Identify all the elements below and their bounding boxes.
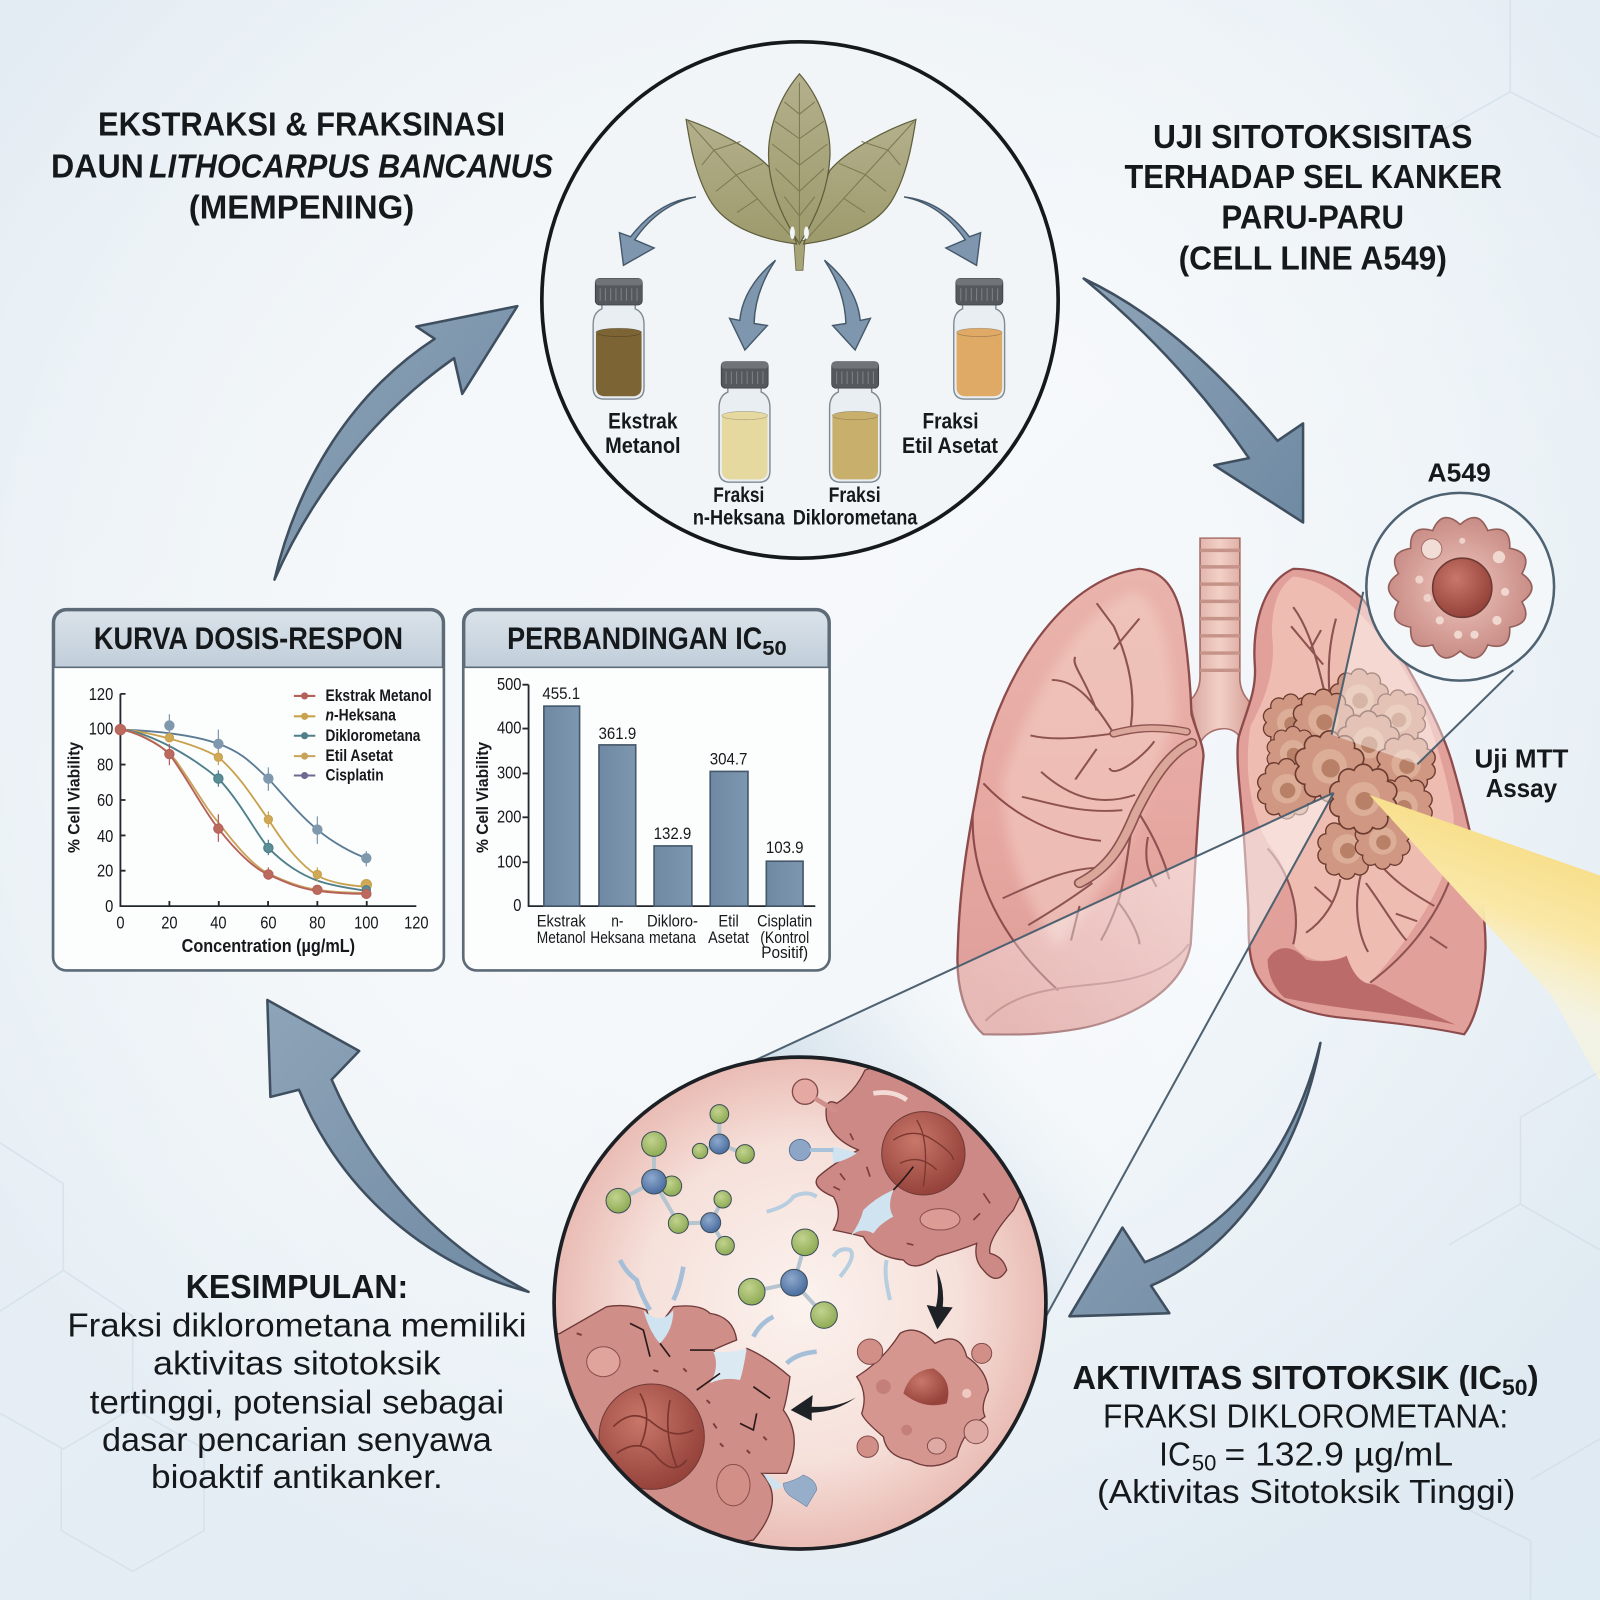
- arrow: to methanol: [619, 197, 696, 265]
- cytotoxic activity text: [1072, 1360, 1539, 1511]
- bar chart: n-: [611, 913, 623, 931]
- cell: apoptotic cell: [857, 1330, 992, 1466]
- right lung: [1238, 569, 1486, 1034]
- line chart axes: 100: [89, 719, 113, 739]
- molecules: [606, 1105, 837, 1328]
- conclusion text: dasar pencarian senyawa: [102, 1422, 492, 1459]
- line chart axes: 100: [354, 913, 379, 933]
- heading: extraction and fractionation: [51, 107, 554, 226]
- cytotoxic activity text: FRAKSI DIKLOROMETANA:: [1103, 1399, 1508, 1436]
- arrow: apoptosis to lysis: [791, 1395, 856, 1421]
- panel header: KURVA DOSIS-RESPON: [94, 620, 403, 656]
- label: fraksi diklorometana: [793, 483, 918, 529]
- icon: three leaves: [686, 74, 916, 270]
- cytotoxic activity text: 50: [1502, 1375, 1528, 1400]
- legend: n-Heksana: [326, 706, 397, 724]
- panel: dose-response curve: [53, 609, 444, 970]
- panel: cell destruction circle: [540, 1057, 1047, 1560]
- label: fraksi etil asetat: Etil Asetat: [902, 433, 998, 458]
- bar chart: 455.1: [542, 685, 580, 703]
- heading: extraction and fractionation: LITHOCARPUS BANCANUS: [149, 149, 554, 186]
- label: MTT assay: Uji MTT: [1474, 745, 1569, 773]
- bar chart: 304.7: [710, 750, 747, 768]
- line chart axes: 60: [97, 790, 113, 810]
- line chart axes: [66, 684, 429, 956]
- illustration: lungs: [957, 538, 1486, 1035]
- bar chart: 300: [497, 763, 521, 783]
- cell: bottom left cancer cell: [558, 1259, 817, 1542]
- bar chart: Heksana: [590, 929, 645, 947]
- cytotoxic activity text: (Aktivitas Sitotoksik Tinggi): [1097, 1474, 1515, 1511]
- bar chart: Asetat: [708, 929, 749, 947]
- line chart axes: 20: [161, 913, 178, 933]
- inset: A549 cell: [1366, 493, 1554, 681]
- magnifier cone to cells: [753, 793, 1334, 1318]
- cell: top right cancer cell: [766, 1068, 1020, 1300]
- line chart axes: 60: [260, 913, 277, 933]
- bar chart: Dikloro-: [647, 913, 698, 931]
- panel header: [465, 611, 828, 667]
- heading: cytotoxicity test: (CELL LINE A549): [1179, 240, 1447, 277]
- bar chart: 400: [497, 718, 521, 738]
- cytotoxic activity text: IC: [1159, 1436, 1191, 1473]
- left lung: [957, 569, 1204, 1035]
- bar chart: 361.9: [598, 725, 636, 743]
- heading: cytotoxicity test: [1124, 119, 1502, 277]
- arrow: to dichloromethane: [824, 260, 870, 350]
- bar chart: 132.9: [654, 825, 691, 843]
- vial: dichloromethane: [830, 362, 880, 482]
- bar chart: 100: [497, 851, 521, 871]
- vial: n-hexane: [719, 362, 770, 482]
- bar chart: % Cell Viability: [474, 742, 492, 853]
- label: fraksi n-heksana: n-Heksana: [693, 505, 786, 529]
- label: ekstrak metanol: Ekstrak: [608, 409, 678, 434]
- arrow: conclusion to charts: [267, 1000, 529, 1292]
- conclusion text: KESIMPULAN:: [186, 1269, 408, 1306]
- line chart axes: 20: [97, 861, 113, 881]
- legend: Diklorometana: [326, 727, 421, 745]
- tumor cluster: [1258, 669, 1435, 879]
- panel: IC50 comparison: [463, 609, 830, 970]
- label: fraksi n-heksana: Fraksi: [713, 483, 764, 507]
- conclusion text: aktivitas sitotoksik: [153, 1345, 441, 1382]
- cytotoxic activity text: = 132.9 µg/mL: [1224, 1436, 1453, 1473]
- arrow: lung to activity: [1069, 1043, 1320, 1316]
- legend: [294, 687, 432, 785]
- dose-response curves: [120, 730, 366, 894]
- cytotoxic activity text: 50: [1192, 1450, 1216, 1475]
- bar chart: Etil: [718, 913, 739, 931]
- conclusion text: [67, 1269, 527, 1496]
- legend: Etil Asetat: [326, 747, 393, 765]
- line chart axes: % Cell Viability: [66, 742, 84, 853]
- label: fraksi diklorometana: Fraksi: [829, 483, 881, 507]
- label: ekstrak metanol: [605, 409, 681, 458]
- cytotoxic activity text: ): [1528, 1360, 1539, 1397]
- arrow: to ethyl acetate: [904, 197, 981, 265]
- bar chart: metana: [649, 929, 697, 947]
- bar chart: Metanol: [537, 929, 586, 947]
- vial: ethyl acetate: [954, 278, 1005, 399]
- line chart axes: 0: [105, 896, 113, 916]
- bar chart: 200: [497, 806, 521, 826]
- label: A549: A549: [1428, 460, 1491, 488]
- line chart axes: Concentration (µg/mL): [182, 935, 355, 956]
- label: MTT assay: [1474, 745, 1569, 803]
- bar chart: 500: [497, 674, 521, 694]
- vial: methanol extract: [593, 278, 644, 399]
- line chart axes: 120: [89, 684, 113, 704]
- line chart axes: 120: [404, 913, 429, 933]
- line chart axes: 40: [97, 826, 113, 846]
- yellow assay beam: [1369, 795, 1600, 1082]
- legend: Cisplatin: [326, 767, 384, 785]
- conclusion text: bioaktif antikanker.: [151, 1459, 443, 1496]
- conclusion text: tertinggi, potensial sebagai: [90, 1384, 504, 1421]
- arrow: charts to extraction: [274, 306, 517, 580]
- panel header: PERBANDINGAN IC: [507, 620, 762, 656]
- panel header: 50: [762, 638, 787, 660]
- label: ekstrak metanol: Metanol: [605, 433, 681, 458]
- label: fraksi etil asetat: Fraksi: [922, 409, 979, 434]
- cytotoxic activity text: AKTIVITAS SITOTOKSIK (IC: [1072, 1360, 1502, 1397]
- bar chart: 103.9: [766, 839, 804, 857]
- heading: cytotoxicity test: PARU-PARU: [1221, 200, 1404, 237]
- line chart axes: 80: [309, 913, 326, 933]
- conclusion text: Fraksi diklorometana memiliki: [67, 1308, 527, 1345]
- label: MTT assay: Assay: [1486, 775, 1558, 803]
- heading: extraction and fractionation: (MEMPENING): [189, 189, 414, 226]
- label: fraksi diklorometana: Diklorometana: [793, 505, 918, 529]
- bar chart: Ekstrak: [537, 913, 586, 931]
- arrow: cell to apoptosis: [927, 1268, 953, 1329]
- label: fraksi n-heksana: [693, 483, 786, 529]
- data points with error bars: [115, 714, 371, 898]
- heading: cytotoxicity test: TERHADAP SEL KANKER: [1124, 159, 1502, 196]
- line chart axes: 80: [97, 754, 113, 774]
- panel header: [54, 611, 443, 667]
- arrow: to hexane: [730, 260, 776, 350]
- bar chart: (Kontrol: [760, 929, 809, 947]
- label: fraksi etil asetat: [902, 409, 998, 458]
- heading: extraction and fractionation: EKSTRAKSI & FRAKSINASI: [98, 107, 505, 144]
- trachea: [1189, 538, 1250, 743]
- bar chart: [474, 674, 815, 962]
- magnifier cone to A549: [1332, 592, 1513, 764]
- bar chart: Cisplatin: [757, 913, 812, 931]
- heading: cytotoxicity test: UJI SITOTOKSISITAS: [1153, 119, 1472, 156]
- line chart axes: 40: [210, 913, 227, 933]
- legend: Ekstrak Metanol: [326, 687, 432, 705]
- heading: extraction and fractionation: DAUN: [51, 149, 144, 186]
- panel: extraction circle: [542, 42, 1058, 558]
- bar chart: Positif): [761, 944, 808, 962]
- bar chart: 0: [513, 895, 521, 915]
- line chart axes: 0: [116, 913, 124, 933]
- arrow: extraction to cytotoxicity: [1084, 279, 1303, 522]
